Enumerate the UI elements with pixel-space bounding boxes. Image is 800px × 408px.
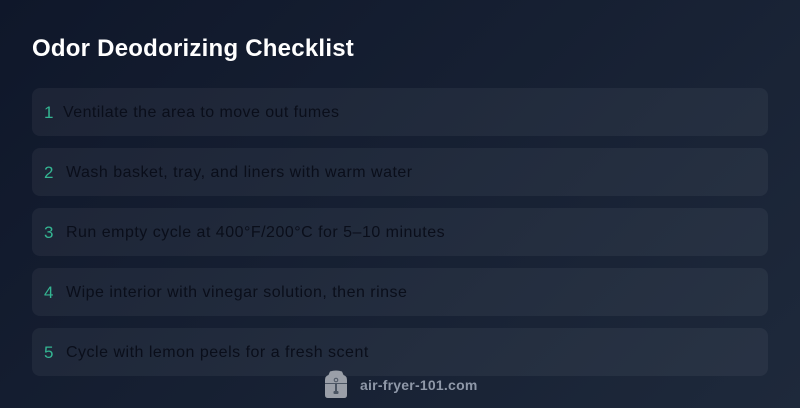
panel: step 4 [32, 268, 768, 316]
title: Odor Deodorizing Checklist [32, 35, 354, 62]
step 3 number: 3 [44, 223, 53, 242]
step 4 number: 4 [44, 283, 53, 302]
panel: step 5 [32, 328, 768, 376]
step 1 number: 1 [44, 103, 53, 122]
step 5 number: 5 [44, 343, 53, 362]
step 4 text: Wipe interior with vinegar solution, then rinse [66, 284, 407, 301]
step 5 text: Cycle with lemon peels for a fresh scent [66, 344, 369, 361]
icon: air fryer [325, 370, 347, 398]
panel: step 3 [32, 208, 768, 256]
step 1 text: Ventilate the area to move out fumes [63, 104, 339, 121]
panel: step 2 [32, 148, 768, 196]
panel: step 1 [32, 88, 768, 136]
footer: brand [325, 370, 478, 398]
step 3 text: Run empty cycle at 400°F/200°C for 5–10 minutes [66, 224, 445, 241]
step 2 text: Wash basket, tray, and liners with warm water [66, 164, 413, 181]
step 2 number: 2 [44, 163, 53, 182]
brand url: air-fryer-101.com [360, 377, 478, 393]
